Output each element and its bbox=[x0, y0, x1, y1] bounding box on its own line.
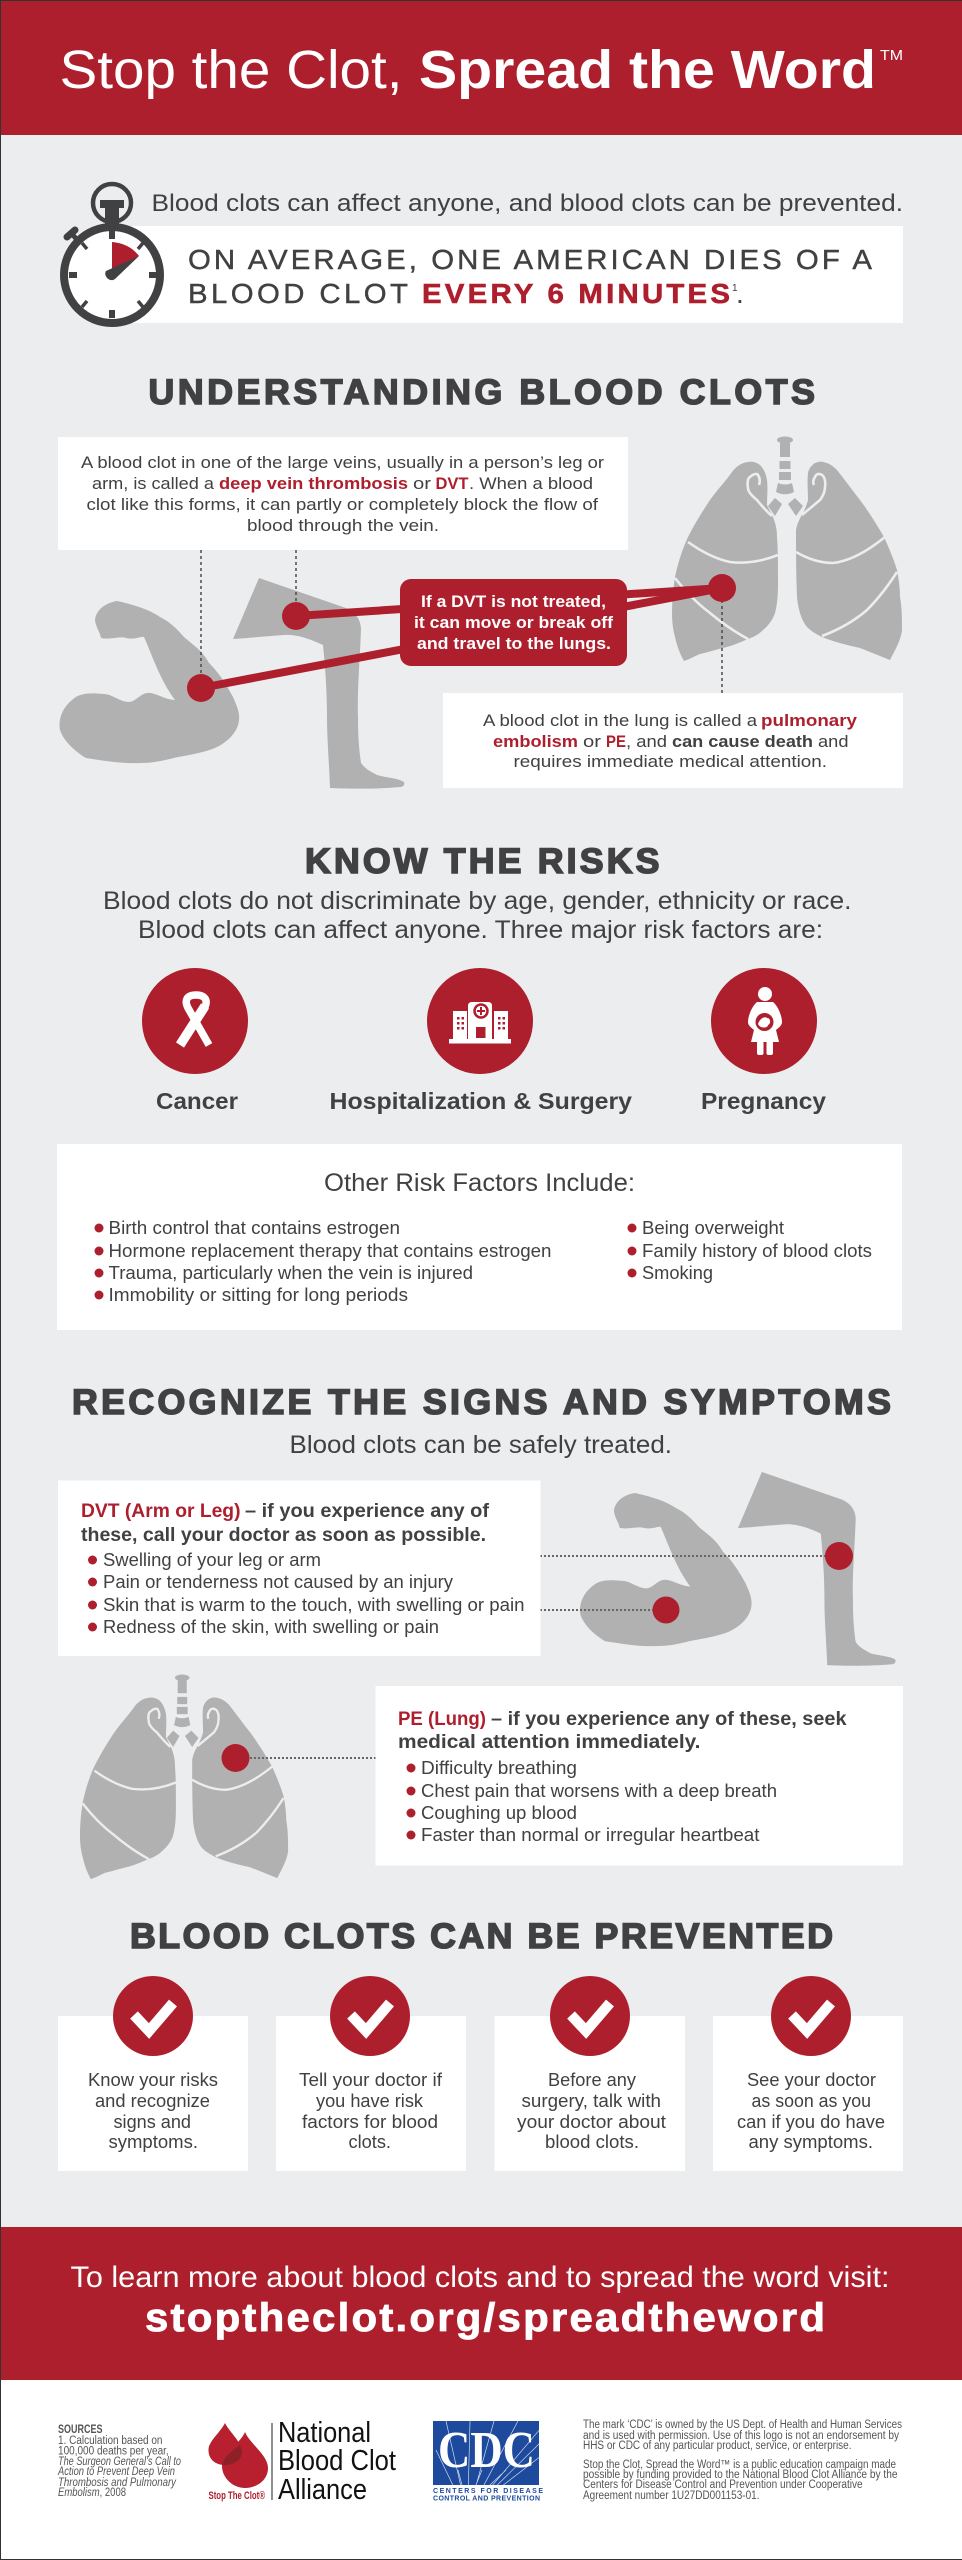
sources: SOURCES bbox=[58, 2424, 103, 2436]
panel: deep vein thrombosis text: DVT bbox=[436, 474, 469, 493]
title: Spread the Word bbox=[419, 40, 876, 100]
card: see your doctor: See your doctor bbox=[747, 2070, 876, 2090]
DVT symptoms heading: – if you experience any of bbox=[245, 1501, 490, 1522]
header banner bbox=[0, 0, 962, 135]
title bbox=[60, 40, 903, 100]
panel: DVT symptoms bbox=[58, 1480, 540, 1656]
card: see your doctor: can if you do have bbox=[737, 2112, 885, 2132]
dotted leader lines: DVT bbox=[540, 1556, 826, 1610]
subheading: safely treated: Blood clots can be safely treated. bbox=[290, 1431, 672, 1459]
title: TM bbox=[880, 47, 903, 64]
panel: deep vein thrombosis text: arm, is called a bbox=[92, 474, 215, 493]
DVT symptoms heading: these, call your doctor as soon as possible. bbox=[81, 1525, 486, 1546]
PE symptoms heading: medical attention immediately. bbox=[398, 1732, 700, 1753]
callout: untreated DVT: If a DVT is not treated, bbox=[421, 592, 606, 611]
footer banner: call to action: To learn more about blood clots and to spread the word visit: bbox=[70, 2261, 889, 2294]
panel: other risk factors bbox=[57, 1144, 902, 1330]
legal notice: The mark ‘CDC’ is owned by the US Dept. of Health and Human Services bbox=[583, 2419, 902, 2431]
heading: know the risks: KNOW THE RISKS bbox=[305, 842, 659, 881]
icon: hospital bbox=[427, 968, 533, 1074]
legal notice: Agreement number 1U27DD001153-01. bbox=[583, 2490, 760, 2502]
callout: untreated DVT: it can move or break off bbox=[414, 613, 613, 632]
callout: untreated DVT: and travel to the lungs. bbox=[417, 634, 611, 653]
PE symptoms list: Chest pain that worsens with a deep breath bbox=[421, 1781, 777, 1801]
icon: check mark bbox=[771, 1976, 851, 2056]
panel: pulmonary embolism text bbox=[443, 693, 903, 788]
title: Stop the Clot, bbox=[60, 40, 402, 100]
heading: recognize the signs and symptoms: RECOGNIZE THE SIGNS AND SYMPTOMS bbox=[72, 1383, 891, 1422]
card: know your risks: and recognize bbox=[95, 2091, 210, 2111]
panel: pulmonary embolism text: requires immediate medical attention. bbox=[514, 752, 827, 771]
panel: deep vein thrombosis text bbox=[58, 437, 628, 550]
label: pregnancy: Pregnancy bbox=[701, 1088, 826, 1114]
panel: deep vein thrombosis text: or bbox=[413, 474, 431, 493]
sources bbox=[57, 2424, 181, 2499]
card: before any surgery bbox=[494, 1976, 685, 2171]
panel: deep vein thrombosis text: deep vein thrombosis bbox=[219, 474, 408, 493]
footer banner: call to action: stoptheclot.org/spreadtheword bbox=[145, 2295, 825, 2340]
clot marker: symptoms arm bbox=[652, 1596, 680, 1624]
legal notice bbox=[583, 2419, 902, 2502]
icon: cancer ribbon bbox=[142, 968, 248, 1074]
clot marker: symptoms leg bbox=[825, 1542, 853, 1570]
PE symptoms list: Coughing up blood bbox=[421, 1803, 577, 1823]
panel: pulmonary embolism text: A blood clot in the lung is called a bbox=[483, 711, 758, 730]
clot marker: leg bbox=[282, 602, 310, 630]
list: right column bbox=[628, 1218, 872, 1283]
DVT symptoms heading: DVT (Arm or Leg) bbox=[81, 1501, 240, 1522]
PE symptoms list: Faster than normal or irregular heartbeat bbox=[421, 1825, 760, 1845]
statistic text: . bbox=[736, 278, 744, 309]
legal notice: Centers for Disease Control and Prevention under Cooperative bbox=[583, 2479, 863, 2491]
panel: pulmonary embolism text: can cause death bbox=[672, 732, 813, 751]
card: know your risks: signs and bbox=[114, 2112, 191, 2132]
list: left column: Birth control that contains estrogen bbox=[108, 1218, 400, 1238]
clot marker: arm bbox=[187, 674, 215, 702]
panel: pulmonary embolism text: , and bbox=[626, 732, 667, 751]
panel: PE symptoms bbox=[376, 1686, 903, 1866]
logo: CDC: CONTROL AND PREVENTION bbox=[433, 2496, 540, 2502]
risks introduction bbox=[103, 887, 852, 944]
legal notice: possible by funding provided to the National Blood Clot Alliance by the bbox=[583, 2469, 898, 2481]
panel: pulmonary embolism text: or bbox=[583, 732, 601, 751]
PE symptoms list: Difficulty breathing bbox=[421, 1758, 577, 1778]
legal notice: Stop the Clot, Spread the Word™ is a public education campaign made bbox=[583, 2459, 896, 2471]
card: before any surgery: surgery, talk with bbox=[522, 2091, 661, 2111]
legal notice: HHS or CDC of any particular product, service, or enterprise. bbox=[583, 2440, 852, 2452]
logo: CDC: CENTERS FOR DISEASE bbox=[433, 2488, 543, 2495]
card: see your doctor: any symptoms. bbox=[748, 2132, 873, 2152]
sources: Embolism, 2008 bbox=[58, 2487, 126, 2499]
illustration: leg silhouette bbox=[233, 578, 404, 789]
connector lines between clots and lungs bbox=[201, 588, 722, 688]
label: hospitalization and surgery: Hospitalization & Surgery bbox=[330, 1088, 632, 1114]
icon: pregnancy bbox=[711, 968, 817, 1074]
PE symptoms heading: PE (Lung) bbox=[398, 1709, 486, 1730]
heading: blood clots can be prevented: BLOOD CLOTS CAN BE PREVENTED bbox=[130, 1917, 833, 1956]
sources: Thrombosis and Pulmonary bbox=[58, 2477, 177, 2489]
dotted leader line: PE bbox=[250, 1757, 376, 1759]
icon: check mark bbox=[330, 1976, 410, 2056]
panel: deep vein thrombosis text: . When a blood bbox=[469, 474, 593, 493]
card: tell your doctor: clots. bbox=[348, 2132, 391, 2152]
panel: pulmonary embolism text: pulmonary bbox=[761, 711, 858, 730]
statistic text bbox=[188, 245, 873, 310]
dashed leader lines bbox=[201, 550, 722, 693]
logo: National Blood Clot Alliance: Alliance bbox=[278, 2474, 367, 2506]
list: right column: Being overweight bbox=[642, 1218, 784, 1238]
list: right column: Smoking bbox=[642, 1263, 713, 1283]
PE symptoms heading bbox=[398, 1709, 847, 1753]
icon: stopwatch bbox=[64, 184, 160, 323]
panel: deep vein thrombosis text: A blood clot in one of the large veins, usually in a person’s leg or bbox=[81, 453, 604, 472]
label: cancer: Cancer bbox=[156, 1088, 238, 1114]
panel: pulmonary embolism text: embolism bbox=[493, 732, 578, 751]
logo: CDC bbox=[433, 2421, 543, 2502]
card: tell your doctor: you have risk bbox=[316, 2091, 424, 2111]
card: tell your doctor bbox=[276, 1976, 466, 2171]
risks introduction: Blood clots do not discriminate by age, gender, ethnicity or race. bbox=[103, 887, 852, 915]
card: tell your doctor: Tell your doctor if bbox=[299, 2070, 443, 2090]
sources: The Surgeon General’s Call to bbox=[58, 2456, 181, 2468]
list: left column: Trauma, particularly when the vein is injured bbox=[108, 1263, 473, 1283]
logo: National Blood Clot Alliance: National bbox=[278, 2417, 371, 2449]
card: before any surgery: your doctor about bbox=[517, 2112, 666, 2132]
card: before any surgery: blood clots. bbox=[545, 2132, 639, 2152]
sources: 1. Calculation based on bbox=[58, 2435, 162, 2447]
list: left column: Immobility or sitting for long periods bbox=[108, 1285, 408, 1305]
DVT symptoms list: Pain or tenderness not caused by an injury bbox=[103, 1572, 453, 1592]
statistic text: 1 bbox=[732, 283, 738, 294]
statistic text: EVERY 6 MINUTES bbox=[422, 279, 730, 310]
DVT symptoms list: Swelling of your leg or arm bbox=[103, 1550, 321, 1570]
card: know your risks: Know your risks bbox=[88, 2070, 218, 2090]
footer banner: call to action bbox=[0, 2227, 962, 2380]
illustration: lungs bbox=[672, 436, 902, 661]
DVT symptoms heading bbox=[81, 1501, 490, 1546]
illustration: arm silhouette, symptoms bbox=[580, 1493, 752, 1646]
PE symptoms heading: – if you experience any of these, seek bbox=[491, 1709, 847, 1730]
DVT symptoms list: Skin that is warm to the touch, with swelling or pain bbox=[103, 1595, 524, 1615]
footer panel bbox=[0, 2380, 962, 2560]
list: left column bbox=[94, 1218, 552, 1305]
icon: check mark bbox=[550, 1976, 630, 2056]
heading: understanding blood clots: UNDERSTANDING BLOOD CLOTS bbox=[148, 373, 815, 412]
logo: National Blood Clot Alliance: Blood Clot bbox=[278, 2445, 396, 2477]
illustration: lungs, symptoms bbox=[80, 1675, 288, 1879]
logo: National Blood Clot Alliance bbox=[208, 2417, 396, 2506]
other risk factors heading: Other Risk Factors Include: bbox=[324, 1169, 635, 1197]
list: left column: Hormone replacement therapy that contains estrogen bbox=[108, 1241, 552, 1261]
callout: untreated DVT bbox=[400, 579, 627, 666]
DVT symptoms list bbox=[88, 1550, 524, 1637]
intro sentence: Blood clots can affect anyone, and blood clots can be prevented. bbox=[152, 190, 903, 217]
card: know your risks bbox=[58, 1976, 248, 2171]
DVT symptoms list: Redness of the skin, with swelling or pain bbox=[103, 1617, 439, 1637]
clot marker: lung bbox=[708, 574, 736, 602]
card: know your risks: symptoms. bbox=[108, 2132, 198, 2152]
card: tell your doctor: factors for blood bbox=[302, 2112, 438, 2132]
risks introduction: Blood clots can affect anyone. Three major risk factors are: bbox=[138, 916, 823, 944]
illustration: leg silhouette, symptoms bbox=[738, 1472, 896, 1666]
card: before any surgery: Before any bbox=[548, 2070, 636, 2090]
card: see your doctor bbox=[713, 1976, 903, 2171]
logo: National Blood Clot Alliance: Stop The Clot® bbox=[208, 2490, 265, 2502]
logo: CDC: CDC bbox=[438, 2422, 535, 2479]
panel: every 6 minutes statistic bbox=[120, 226, 903, 323]
statistic text: BLOOD CLOT bbox=[188, 279, 408, 310]
sources: 100,000 deaths per year, bbox=[58, 2446, 169, 2458]
sources: Action to Prevent Deep Vein bbox=[57, 2466, 175, 2478]
statistic text: ON AVERAGE, ONE AMERICAN DIES OF A bbox=[188, 245, 873, 276]
icon: check mark bbox=[113, 1976, 193, 2056]
legal notice: and is used with permission. Use of this logo is not an endorsement by bbox=[583, 2430, 899, 2442]
panel: deep vein thrombosis text: clot like this forms, it can partly or completely block the flow of bbox=[86, 495, 598, 514]
card: see your doctor: as soon as you bbox=[752, 2091, 871, 2111]
list: right column: Family history of blood clots bbox=[642, 1241, 872, 1261]
panel: deep vein thrombosis text: blood through the vein. bbox=[247, 516, 439, 535]
icon: blood drops bbox=[208, 2423, 268, 2488]
panel: pulmonary embolism text: PE bbox=[606, 732, 626, 751]
panel: pulmonary embolism text: and bbox=[818, 732, 848, 751]
clot marker: symptoms lung bbox=[222, 1744, 250, 1772]
PE symptoms list bbox=[406, 1758, 777, 1845]
illustration: arm silhouette bbox=[60, 601, 239, 763]
